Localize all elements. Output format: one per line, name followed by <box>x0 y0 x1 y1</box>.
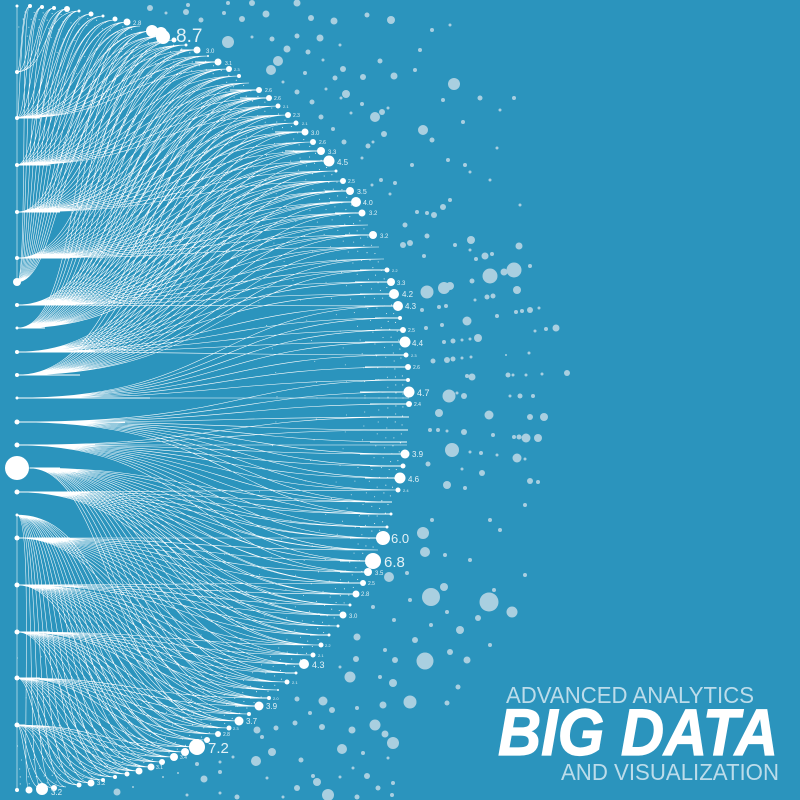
value labels: 2.0 <box>273 696 279 701</box>
title: advanced analytics: ADVANCED ANALYTICS <box>506 682 754 708</box>
hub nodes on left axis <box>5 70 29 728</box>
scattered outer data dots <box>114 0 570 800</box>
value labels: 2.5 <box>368 581 375 587</box>
value labels: 3.5 <box>357 189 367 196</box>
value labels: 3.2 <box>369 211 378 217</box>
value labels: 3.1 <box>225 61 232 67</box>
value labels: 2.6 <box>265 88 272 94</box>
upper half curves <box>17 6 409 790</box>
value labels: 2.5 <box>408 328 415 334</box>
value labels: 4.0 <box>363 200 373 207</box>
value labels: 2.1 <box>292 680 298 685</box>
value labels: 3.7 <box>246 717 258 726</box>
value labels: 3.0 <box>349 614 358 620</box>
lower half curves <box>17 380 409 790</box>
title: big data: BIG DATA <box>498 695 778 769</box>
value labels: 4.3 <box>312 660 325 670</box>
value labels: 2.8 <box>223 732 230 738</box>
value labels: 2.2 <box>325 643 331 648</box>
value labels: 2.3 <box>411 353 417 358</box>
value labels: 2.8 <box>361 592 370 598</box>
value labels: 3.0 <box>311 131 320 137</box>
flowing network lines <box>17 6 409 790</box>
value labels: 6.8 <box>384 554 405 571</box>
value labels: 2.1 <box>283 104 289 109</box>
title block <box>498 682 779 785</box>
thick line ends and hub stems <box>17 50 409 725</box>
value labels: 2.3 <box>233 726 239 731</box>
value labels: 2.6 <box>274 96 281 102</box>
value labels: 2.6 <box>319 140 326 146</box>
value labels: 4.3 <box>405 302 417 311</box>
value labels: 2.1 <box>318 653 324 658</box>
value labels: 4.6 <box>408 475 420 484</box>
value nodes on arc <box>15 4 414 795</box>
value labels: 3.3 <box>397 281 406 287</box>
value labels: 4.5 <box>337 158 349 167</box>
value labels: 2.4 <box>403 488 409 493</box>
value labels: 2.8 <box>133 21 142 27</box>
value labels: 3.4 <box>180 755 187 761</box>
value labels: 3.9 <box>412 450 424 459</box>
value labels: 2.5 <box>348 179 355 185</box>
value labels: 3.2 <box>51 788 63 797</box>
value labels: 2.4 <box>414 402 421 408</box>
value labels: 6.0 <box>391 531 409 546</box>
value labels: 3.1 <box>156 765 163 771</box>
value labels <box>51 21 430 797</box>
value labels: 4.7 <box>417 388 430 398</box>
value labels: 3.9 <box>266 702 278 711</box>
value labels: 2.1 <box>302 121 308 126</box>
value labels: 2.3 <box>234 67 240 72</box>
value labels: 3.3 <box>328 150 337 156</box>
fine inner dot rings <box>0 12 403 784</box>
title: and visualization: AND VISUALIZATION <box>561 759 779 785</box>
value labels: 2.6 <box>413 365 420 371</box>
value labels: 3.2 <box>97 781 106 787</box>
value labels: 3.0 <box>206 49 215 55</box>
value labels: 3.2 <box>380 234 389 240</box>
value labels: 7.2 <box>208 740 229 757</box>
value labels: 4.2 <box>402 290 414 299</box>
value labels: 4.4 <box>412 339 424 348</box>
value labels: 8.7 <box>176 26 202 47</box>
value labels: 2.3 <box>293 113 300 119</box>
value labels: 2.2 <box>392 268 398 273</box>
value labels: 3.5 <box>375 571 384 577</box>
